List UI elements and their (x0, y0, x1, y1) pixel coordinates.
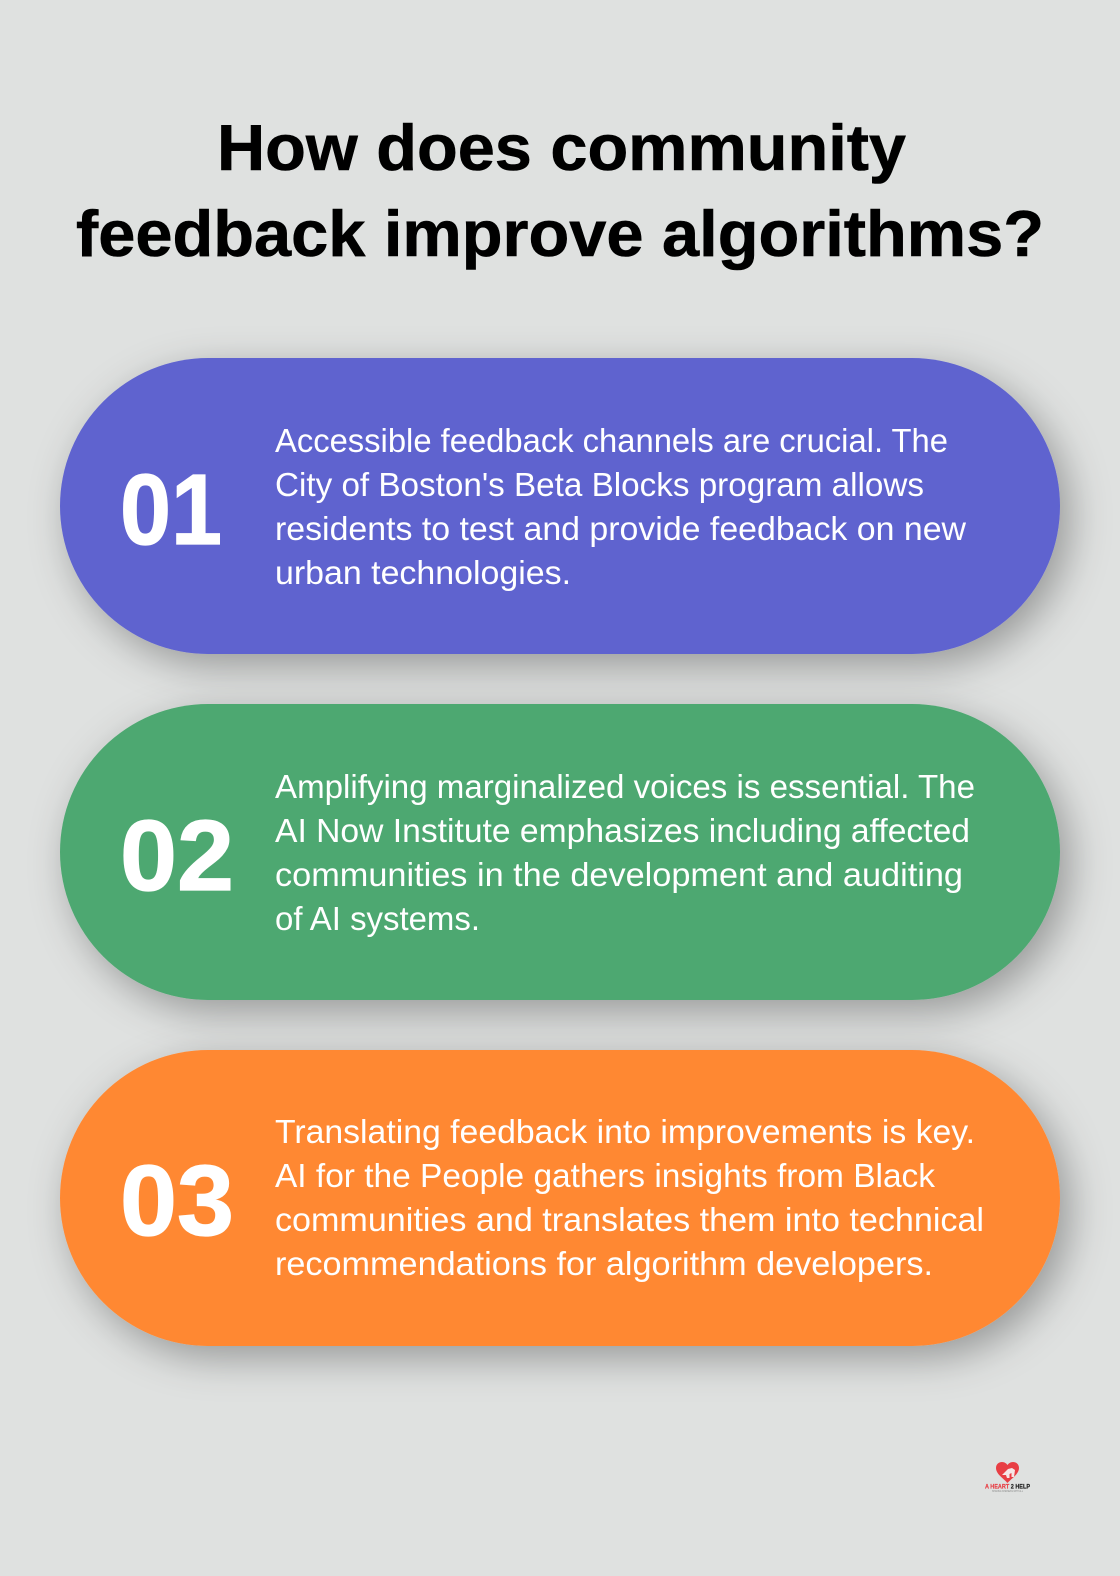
text block: step 01: City of Boston's Beta Blocks program allows (275, 466, 924, 503)
title: feedback improve algorithms? (76, 197, 1044, 270)
title (76, 111, 1044, 270)
text block: step 03 (275, 1113, 984, 1282)
number: 02: 02 (120, 800, 234, 912)
text block: step 03: recommendations for algorithm developers. (275, 1245, 933, 1282)
pill background: step 02 (60, 704, 1060, 1000)
logo tagline: SHARING KINDNESS WITH ALL (992, 1490, 1024, 1493)
panel: step 02 (60, 704, 1060, 1000)
number: 03: 03 (120, 1145, 234, 1257)
text block: step 02: Amplifying marginalized voices is essential. The (275, 768, 975, 805)
text block: step 03: AI for the People gathers insights from Black (275, 1157, 936, 1194)
panel: step 03 (60, 1050, 1060, 1346)
text block: step 02: AI Now Institute emphasizes including affected (275, 812, 970, 849)
title: How does community (217, 111, 906, 184)
text block: step 02: communities in the development and auditing (275, 856, 963, 893)
text block: step 01 (275, 422, 966, 591)
text block: step 03: communities and translates them into technical (275, 1201, 984, 1238)
text block: step 01: Accessible feedback channels are crucial. The (275, 422, 948, 459)
pill background: step 03 (60, 1050, 1060, 1346)
logo: A Heart 2 Help (985, 1462, 1031, 1493)
text block: step 01: urban technologies. (275, 554, 571, 591)
icon: heart with hands (996, 1462, 1019, 1483)
logo wordmark: A HEART 2 HELP (985, 1484, 1031, 1490)
pill background: step 01 (60, 358, 1060, 654)
number: 01: 01 (120, 454, 222, 566)
text block: step 01: residents to test and provide feedback on new (275, 510, 966, 547)
text block: step 03: Translating feedback into improvements is key. (275, 1113, 975, 1150)
text block: step 02: of AI systems. (275, 900, 480, 937)
text block: step 02 (275, 768, 975, 937)
panel: step 01 (60, 358, 1060, 654)
